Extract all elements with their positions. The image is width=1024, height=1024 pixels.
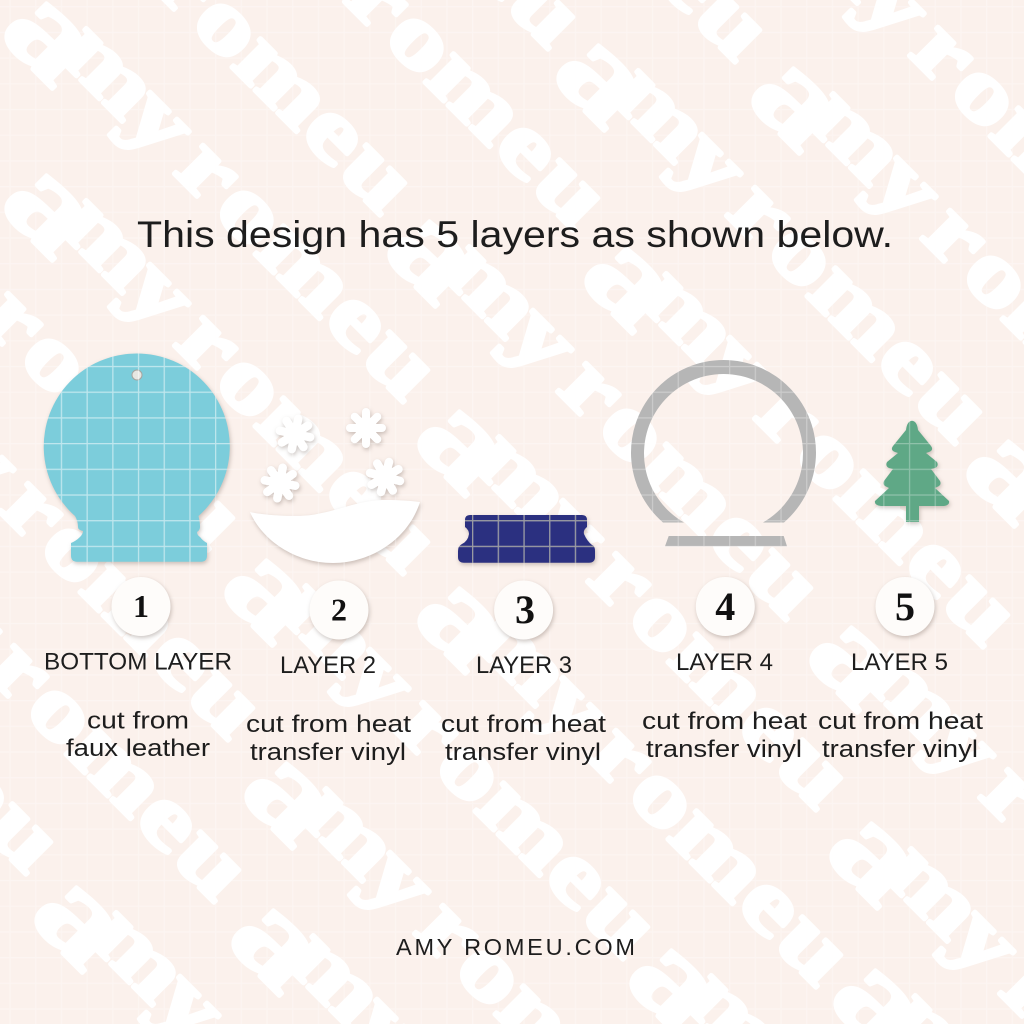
badge 2: 2 — [331, 592, 347, 628]
badge 1 — [112, 577, 170, 636]
label: layer 3: LAYER 3 — [476, 652, 572, 679]
description: layer 4: transfer vinyl — [646, 736, 802, 763]
description: layer 3: cut from heat — [441, 711, 606, 738]
description: layer 1: faux leather — [66, 735, 210, 762]
label: layer 2: LAYER 2 — [280, 652, 376, 679]
icon: snowflake lower left — [262, 465, 298, 501]
watermark pattern: a — [360, 174, 515, 328]
layer 3: navy base shape — [458, 515, 595, 563]
watermark pattern: a — [724, 21, 879, 175]
layer 4: grey ring and base bar — [631, 360, 816, 546]
watermark pattern: my romeu — [454, 407, 874, 827]
description: layer 1: cut from — [87, 708, 189, 735]
badge 5: 5 — [895, 584, 915, 629]
watermark pattern: a — [529, 0, 684, 152]
description: layer 2 — [246, 711, 411, 766]
layer 2: snowflakes and snow drift — [250, 412, 420, 563]
footer website: AMY ROMEU.COM — [396, 934, 635, 960]
badge 3 — [494, 580, 553, 640]
watermark pattern: my romeu — [454, 584, 874, 1004]
watermark pattern: a — [390, 541, 545, 695]
label: layer 4: LAYER 4 — [676, 649, 773, 676]
watermark pattern: my romeu — [593, 41, 1013, 461]
layer 1: snow globe base shape — [44, 353, 230, 562]
watermark pattern: my romeu — [41, 0, 461, 419]
description: layer 3: transfer vinyl — [445, 739, 601, 766]
label: layer 5: LAYER 5 — [851, 649, 948, 676]
label: bottom layer: BOTTOM LAYER — [44, 648, 232, 675]
watermark pattern: my romeu — [424, 217, 844, 637]
badge 2 — [310, 580, 368, 640]
description: layer 5: cut from heat — [818, 708, 983, 735]
watermark pattern: a — [197, 513, 352, 667]
description: layer 5: transfer vinyl — [822, 736, 978, 763]
badge 1: 1 — [133, 588, 149, 624]
badge 4: 4 — [715, 584, 735, 629]
watermark pattern: my romeu — [261, 556, 681, 976]
icon: snowflake top left — [277, 416, 313, 452]
description: layer 5 — [818, 708, 983, 763]
icon: snowflake lower right — [366, 458, 404, 496]
icon: snowflake top right — [350, 412, 382, 444]
description: layer 3 — [441, 711, 606, 766]
description: layer 2: transfer vinyl — [250, 739, 406, 766]
layer 5: green tree — [875, 421, 949, 522]
description: layer 2: cut from heat — [246, 711, 411, 738]
watermark pattern: a — [217, 716, 372, 870]
watermark pattern: a — [802, 776, 957, 930]
title: This design has 5 layers as shown below. — [137, 214, 893, 255]
badge 4 — [696, 577, 755, 636]
badge 3: 3 — [515, 587, 535, 632]
badge 5 — [876, 577, 934, 636]
watermark pattern: my romeu — [41, 171, 461, 591]
watermark pattern: a — [557, 201, 712, 355]
description: layer 1 — [66, 708, 210, 762]
description: layer 4 — [642, 708, 807, 763]
watermark pattern: a — [7, 840, 162, 994]
watermark pattern: a — [204, 863, 359, 1017]
description: layer 4: cut from heat — [642, 708, 807, 735]
watermark pattern: a — [390, 364, 545, 518]
snow drift — [250, 500, 420, 563]
watermark pattern: a — [782, 580, 937, 734]
